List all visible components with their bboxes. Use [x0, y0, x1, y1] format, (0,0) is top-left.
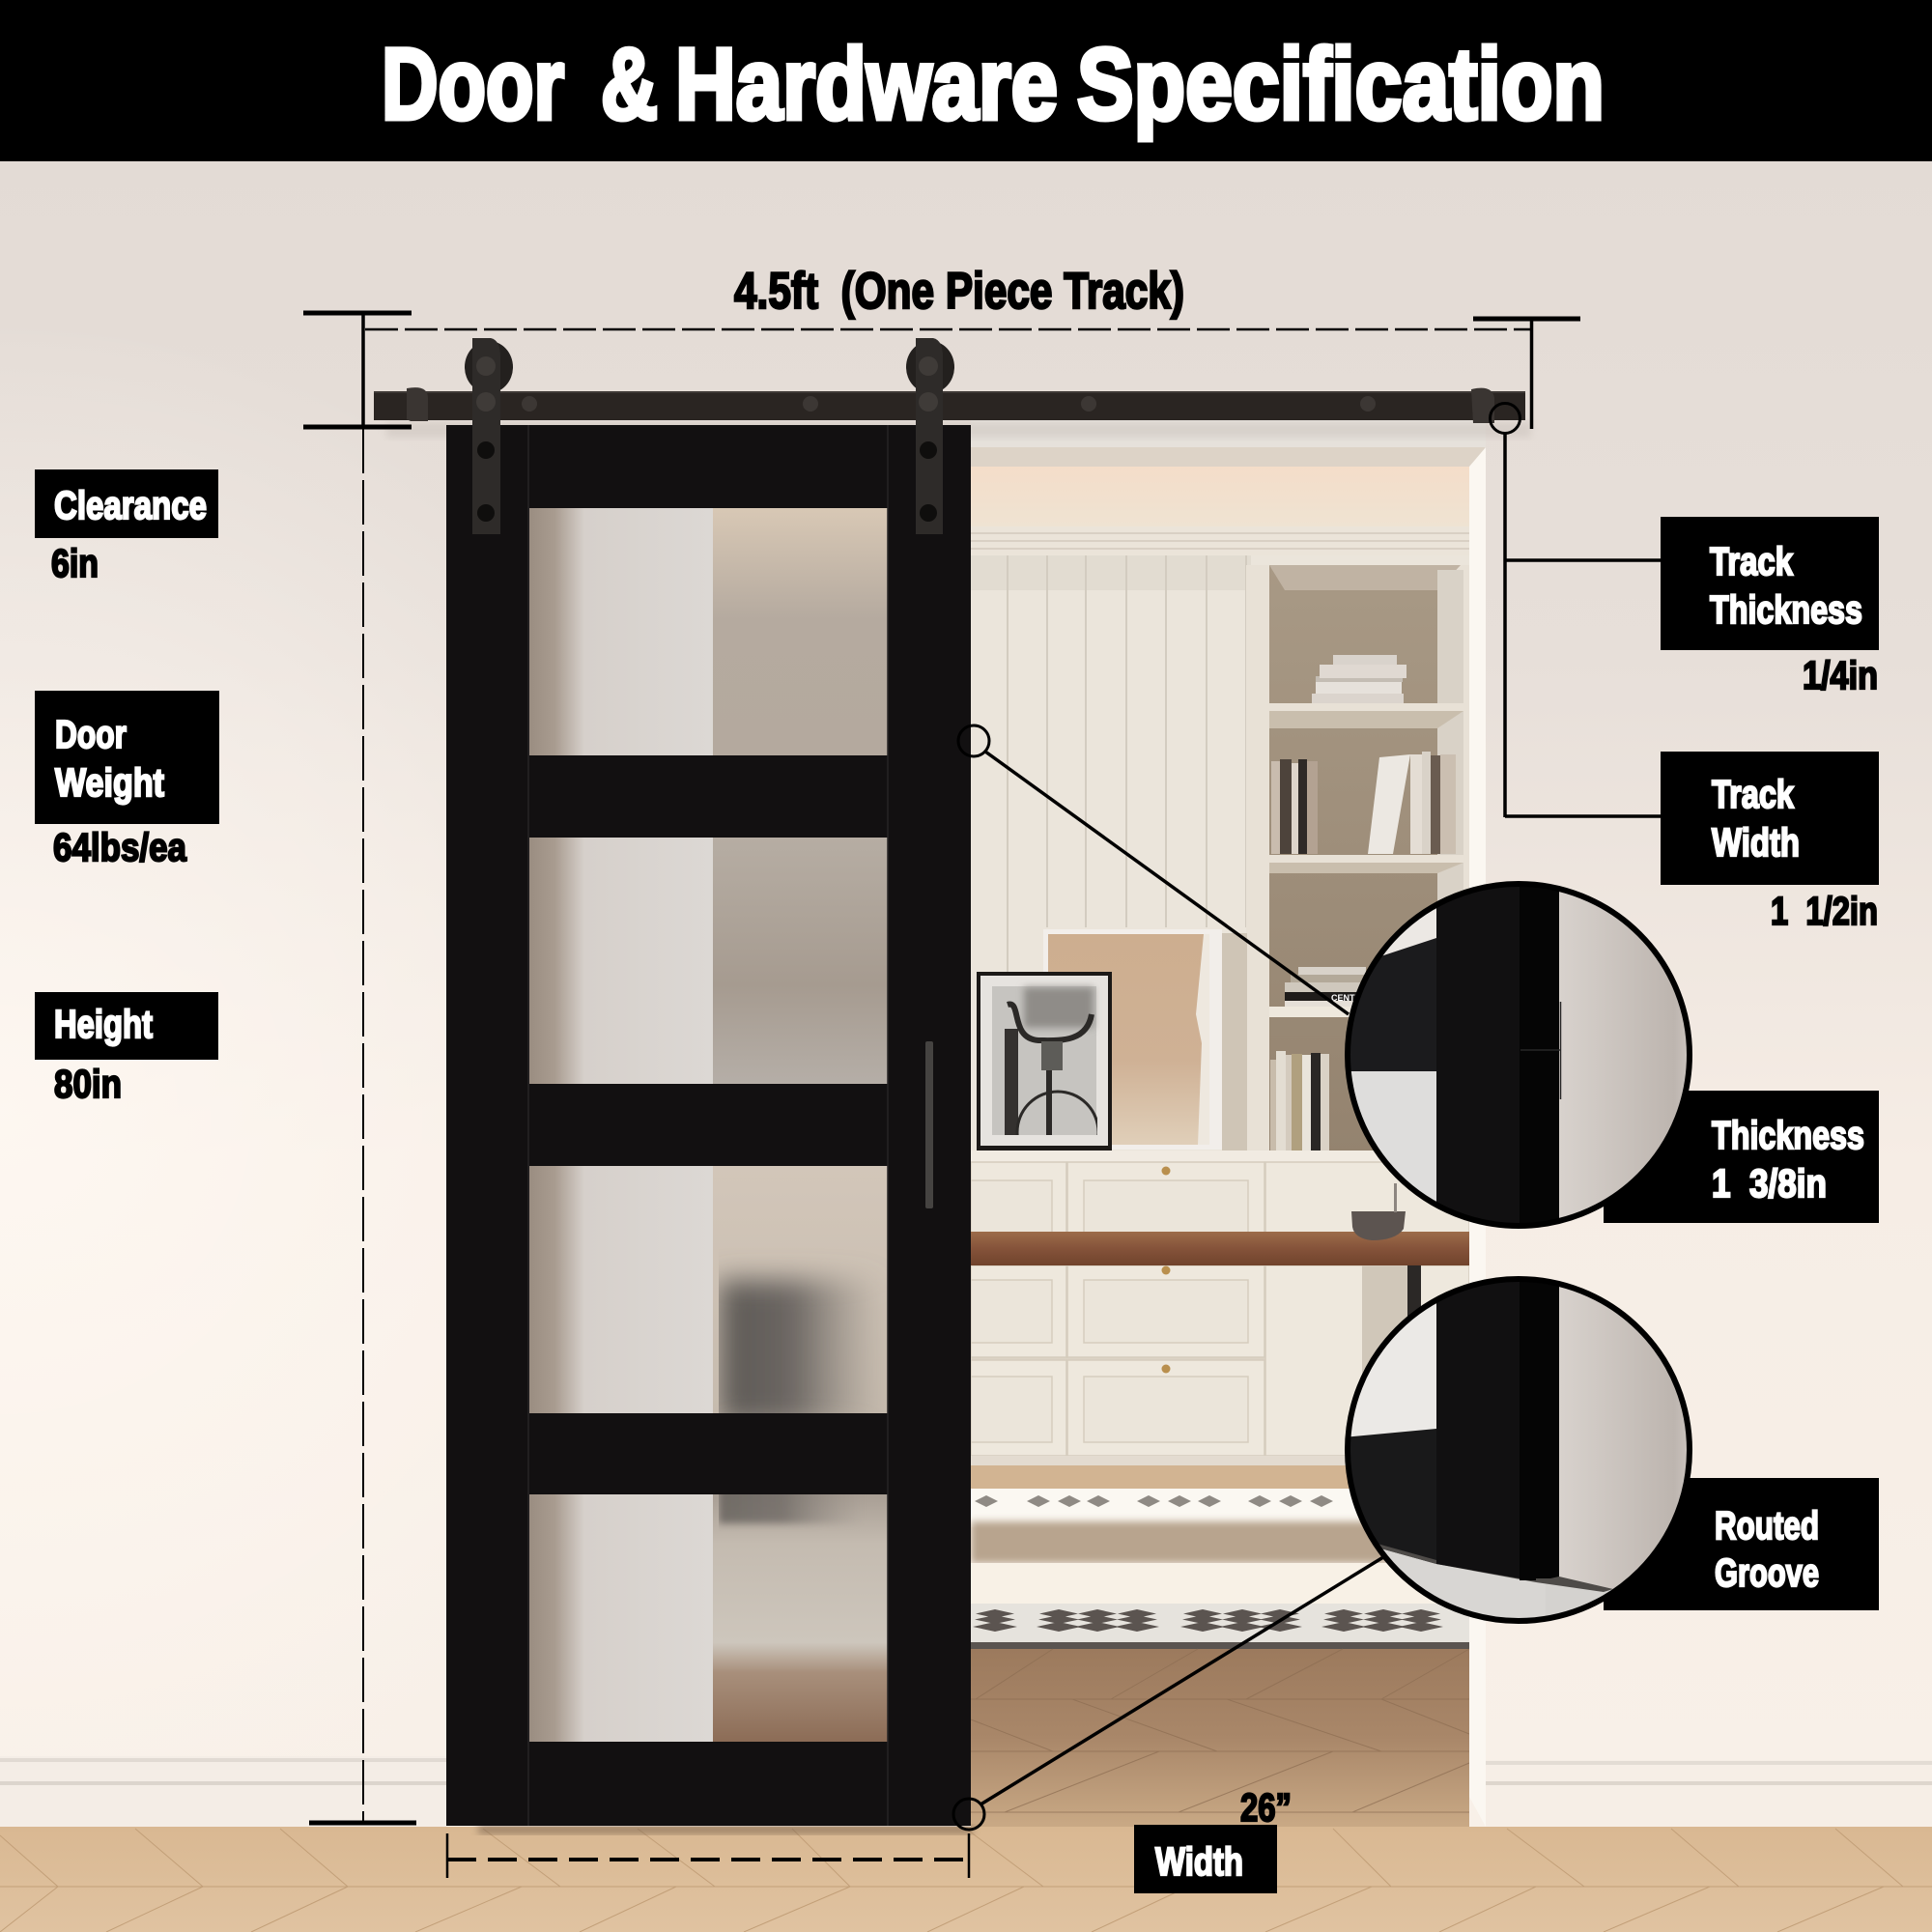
detail circle: door thickness: [1343, 879, 1694, 1235]
panel: height: Height: [54, 1002, 153, 1046]
cabinets: [971, 1151, 1469, 1465]
rug top pattern: [975, 1495, 1333, 1507]
glass pane 1: [529, 508, 888, 755]
title: Hardware: [675, 28, 1058, 141]
panel: track width: 1 1/2in: [1771, 889, 1878, 933]
track length dimension: [303, 313, 1580, 429]
panel: door weight: Door: [55, 712, 127, 756]
panel: clearance: Clearance: [54, 483, 207, 527]
book stack upper: [1312, 655, 1406, 703]
track callout lines: [1490, 404, 1661, 817]
panel: door weight: [35, 691, 219, 869]
panel: routed groove: [1604, 1478, 1879, 1610]
title: &: [601, 28, 658, 141]
rug diamond patterns: [973, 1609, 1443, 1632]
panel: routed groove: Groove: [1715, 1550, 1819, 1595]
panel: height: 80in: [54, 1062, 122, 1106]
title: Door: [382, 28, 564, 141]
wall art: watercolor print: [1043, 929, 1247, 1151]
panel: width: Width: [1155, 1839, 1243, 1884]
books lower shelf: [1270, 967, 1366, 1151]
track length label: 4.5ft (One Piece Track): [734, 263, 1184, 320]
baseboard: [0, 1756, 1932, 1827]
panel: track width: Width: [1712, 820, 1800, 865]
panel: clearance: 6in: [51, 541, 99, 585]
right hanger: [906, 338, 954, 534]
rail seams: [528, 425, 888, 1826]
callout line: top detail: [958, 725, 1349, 1014]
panel: thickness: 1 3/8in: [1712, 1161, 1827, 1206]
bookshelf: [1246, 565, 1469, 1169]
glass pane 4: [529, 1483, 888, 1742]
panel: track thickness: Thickness: [1710, 587, 1862, 632]
header bar: [0, 0, 1932, 161]
panel: routed groove: Routed: [1715, 1503, 1819, 1548]
wall art: bicycle photo: [977, 972, 1112, 1151]
interior room scene: [971, 420, 1486, 1827]
track shadow: [386, 422, 1531, 438]
door frame: [446, 425, 971, 1826]
panel: thickness: Thickness: [1712, 1113, 1864, 1157]
panel: track thickness: [1661, 517, 1879, 697]
interior floor and rug: [971, 1465, 1469, 1827]
panel: height: [35, 992, 218, 1106]
glass pane 2: [529, 838, 888, 1084]
desk: [971, 1232, 1469, 1459]
track spacers: [522, 396, 1376, 412]
callout line: bottom detail: [953, 1557, 1383, 1830]
door: [446, 425, 971, 1826]
soffit and ceiling glow: [971, 420, 1486, 555]
panel: door weight: 64lbs/ea: [53, 825, 187, 869]
beadboard wall: [971, 555, 1469, 1174]
panel: track thickness: 1/4in: [1803, 653, 1878, 697]
glass pane 3: [529, 1166, 888, 1425]
panel: door weight: Weight: [55, 760, 164, 805]
doorway casing: [971, 447, 1486, 1827]
panel: track width: Track: [1712, 772, 1794, 816]
track stops: [407, 387, 1494, 423]
floor: [0, 1827, 1932, 1932]
title: Specification: [1077, 28, 1605, 141]
panel: track width: [1661, 752, 1879, 933]
panel: track thickness: Track: [1710, 539, 1793, 583]
panel: clearance: [35, 469, 218, 585]
width dimension: [447, 1833, 969, 1878]
books middle shelf: [1271, 752, 1456, 854]
detail circle: routed groove: [1343, 1273, 1700, 1642]
title: [382, 28, 1605, 141]
door shadow on floor: [478, 1826, 973, 1833]
width value: 26”: [1240, 1785, 1292, 1830]
height dimension: [309, 429, 416, 1823]
door handle: [925, 1041, 933, 1208]
panel: width: [1134, 1825, 1277, 1893]
desk bowl: [1351, 1183, 1406, 1240]
panel: thickness: [1604, 1091, 1879, 1223]
books lower shelf: CENTU: [1331, 993, 1361, 1003]
barn door track: [374, 387, 1525, 423]
left hanger: [465, 338, 513, 534]
